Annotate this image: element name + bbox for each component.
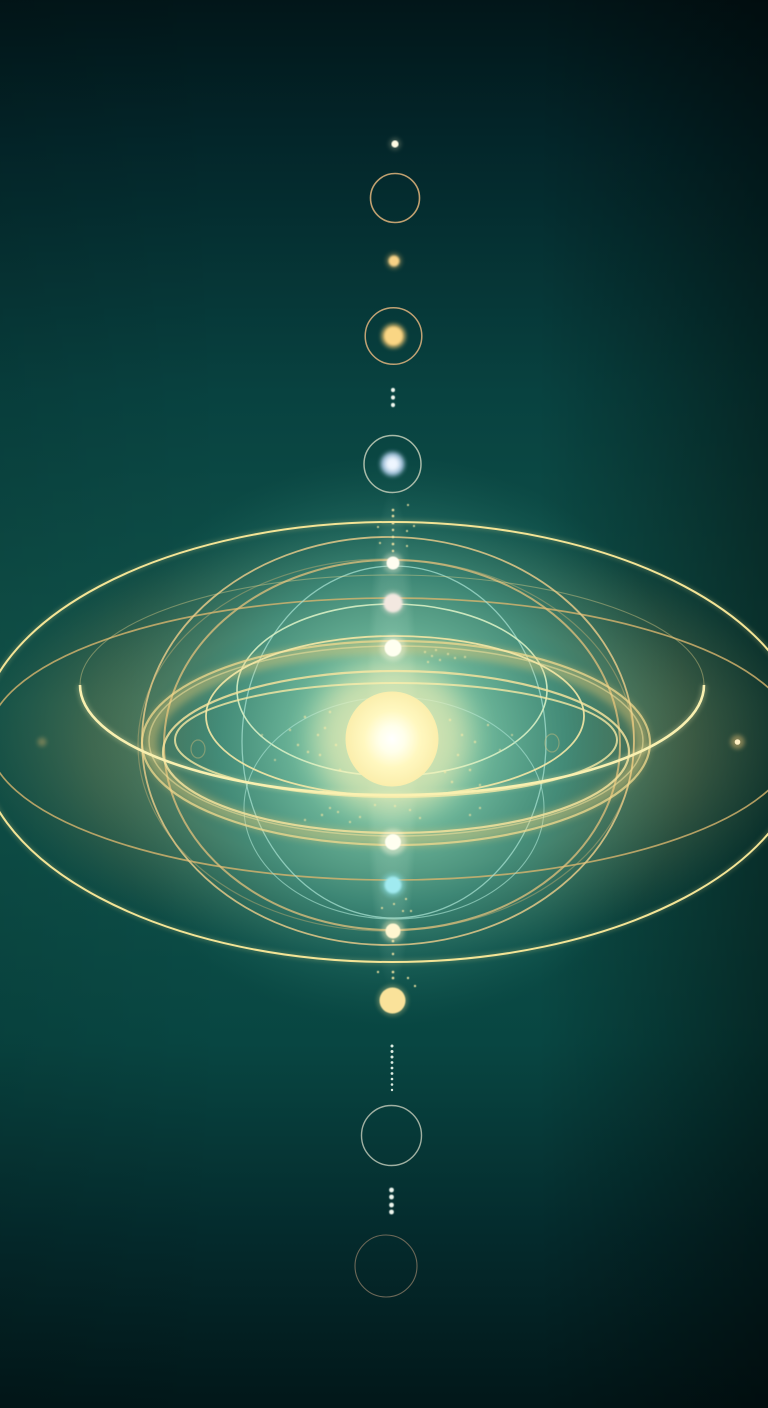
orbit: teal ellipse <box>242 566 546 918</box>
orbit: inner bright ellipse <box>175 683 617 797</box>
orbit: third lower ellipse <box>138 559 634 931</box>
orbit: large tan ellipse <box>142 537 634 945</box>
node: faint bottom ring <box>355 1235 417 1297</box>
central sun <box>314 662 470 814</box>
node: cyan dot <box>381 873 405 897</box>
node: pale pink dot <box>381 591 405 615</box>
dotted connector <box>390 1044 394 1091</box>
node: ringed orange sphere <box>365 308 422 364</box>
stardust particles <box>261 504 513 987</box>
orbit: upper inner ellipse <box>206 636 584 796</box>
node: ringed blue sphere <box>364 436 421 492</box>
orbit: second tan ellipse <box>164 560 620 930</box>
node: top star <box>389 138 401 150</box>
orbit: inner gold ellipse <box>163 671 629 833</box>
node: upper white dot <box>383 553 403 573</box>
orbit: outermost bright ellipse <box>0 522 768 962</box>
orbit rings <box>0 522 768 962</box>
node: lower cream dot <box>382 920 404 942</box>
faint ring markers <box>191 734 559 758</box>
orbit: outer wide tan ellipse <box>0 598 768 880</box>
node: white dot <box>380 635 406 661</box>
node: small orange dot <box>386 253 402 269</box>
three dots upper <box>391 388 395 407</box>
orbit: bright crescent ellipse <box>80 575 704 795</box>
node: empty tan ring <box>370 174 420 222</box>
orbit: pale lower ellipse <box>244 697 544 919</box>
orbit: thick glowing disk <box>142 641 650 845</box>
node: right side light <box>730 735 744 749</box>
orbit: pale upper ellipse <box>237 604 547 776</box>
node: left side light <box>38 738 46 746</box>
node: lower white dot <box>380 829 406 855</box>
node: pale yellow sphere <box>377 985 408 1016</box>
node: empty grey ring <box>362 1106 422 1166</box>
four dots lower <box>389 1188 394 1214</box>
